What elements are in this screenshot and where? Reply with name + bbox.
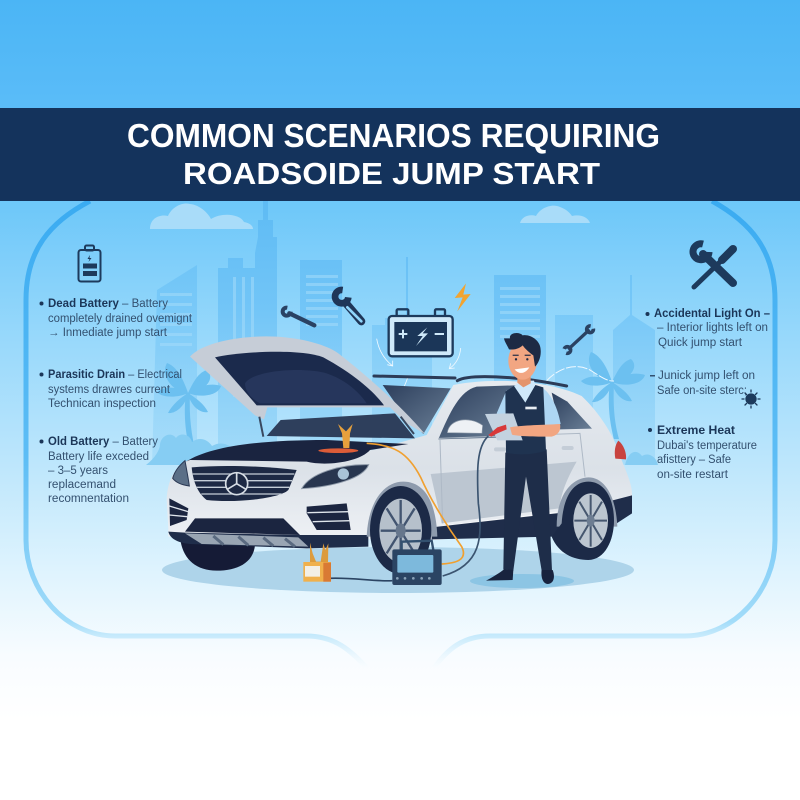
open hood — [190, 336, 425, 434]
ground shadow — [162, 547, 634, 593]
door lower shading — [431, 462, 577, 523]
vest — [505, 385, 546, 454]
left scenario list — [40, 298, 193, 505]
cloud left — [150, 204, 253, 229]
shirt sleeves — [497, 387, 561, 427]
right air intake — [307, 503, 351, 530]
brand star emblem — [226, 473, 248, 495]
dark jumper cable — [443, 436, 488, 576]
technician shadow — [470, 574, 574, 588]
car body — [167, 381, 632, 540]
scenario: old battery: – 3–5 years — [48, 465, 108, 477]
icon: small wrench — [283, 308, 314, 325]
black lead cable — [329, 578, 392, 581]
scenario: dead battery: completely drained ovemignt — [48, 313, 193, 325]
scenario: dead battery: → Inmediate jump start — [48, 327, 168, 339]
car roof rails — [374, 376, 567, 386]
trousers — [503, 449, 552, 571]
face — [508, 342, 537, 380]
front wheel arch — [367, 482, 437, 537]
door details — [438, 433, 585, 527]
lower air intake — [185, 518, 300, 535]
rear wheel rim — [573, 493, 608, 548]
eyebrows and eyes — [513, 355, 531, 360]
battery terminal glow — [318, 448, 358, 453]
door handles — [494, 446, 574, 451]
scenario: jump left on: Safe on-site sterc; — [657, 385, 747, 397]
front lower bumper — [168, 532, 368, 548]
icon: sun — [742, 390, 760, 408]
scenario: parasitic drain: Parasitic Drain – Electrical — [48, 369, 182, 381]
scenario: parasitic drain: Technican inspection — [48, 398, 156, 410]
technician — [485, 333, 561, 584]
skid plate — [185, 533, 308, 547]
skyline background — [152, 201, 655, 465]
panel outline — [26, 201, 775, 668]
door mirror — [447, 420, 483, 433]
scenario: extreme heat: on-site restart — [657, 469, 729, 481]
palm tree right — [581, 352, 645, 439]
red cable clip — [488, 425, 507, 437]
dotted white arc — [547, 367, 614, 381]
icon: orange lightning bolt — [455, 283, 471, 311]
scenario: old battery — [40, 436, 158, 505]
tablet — [485, 413, 523, 440]
left headlight — [173, 461, 189, 486]
jump starter unit — [392, 541, 442, 585]
left air intake — [169, 498, 188, 526]
scenario: accidental light on — [646, 308, 771, 349]
scenario: old battery: Battery life exceded — [48, 451, 149, 463]
scenario: accidental light on: – Interior lights left on — [657, 322, 768, 334]
shoes — [486, 569, 554, 584]
rear tyre — [552, 482, 614, 560]
front wheel rim — [379, 499, 422, 563]
hair — [504, 333, 541, 367]
orange jumper cable — [367, 443, 463, 564]
illustration: car, technician and tools — [167, 283, 632, 585]
scenario: dead battery: Dead Battery – Battery — [48, 298, 168, 310]
icon: thin wrench — [564, 326, 593, 353]
right scenario list — [646, 308, 771, 481]
front tyre — [370, 486, 431, 574]
scenario: old battery: Old Battery – Battery — [48, 436, 158, 448]
cloud right — [520, 206, 590, 223]
windshield — [383, 385, 451, 434]
radiator grille — [192, 466, 297, 501]
scenario: old battery: recomnentation — [48, 493, 129, 505]
building window stripes — [160, 275, 540, 397]
scenario: accidental light on: Quick jump start — [658, 337, 743, 349]
dark hood base — [186, 440, 408, 464]
shirt collar — [514, 381, 535, 403]
rear window — [552, 393, 592, 429]
bush right — [625, 452, 658, 465]
hood struts — [259, 417, 414, 437]
clamp box — [303, 543, 331, 582]
scenario: accidental light on: Accidental Light On – — [654, 308, 771, 320]
icon: large wrench — [335, 290, 361, 321]
front-left tyre — [181, 542, 255, 571]
door window — [438, 385, 515, 439]
forearm and hand — [510, 424, 560, 437]
engine bay glass — [267, 413, 415, 438]
neck — [517, 373, 531, 387]
bushes left — [146, 435, 240, 465]
scenario: dead battery — [40, 298, 193, 339]
title line 2: ROADSOIDE JUMP START — [183, 156, 600, 191]
scenario: jump left on — [650, 370, 755, 397]
scenario: old battery: replacemand — [48, 479, 116, 491]
scenario: extreme heat: afisttery – Safe — [657, 454, 731, 466]
scenario: extreme heat: Extreme Heat — [657, 425, 735, 437]
white arrows — [377, 339, 461, 398]
rear wheel arch — [557, 477, 617, 527]
scenario: parasitic drain — [40, 369, 182, 410]
tail light — [615, 441, 626, 459]
car lower sill — [432, 512, 565, 539]
title line 1: COMMON SCENARIOS REQUIRING — [127, 117, 660, 154]
rear bumper — [612, 495, 632, 527]
icon: battery — [78, 246, 100, 282]
title banner — [0, 108, 800, 201]
scenario: extreme heat: Dubai's temperature — [657, 440, 757, 452]
icon: wrench and screwdriver — [693, 244, 733, 287]
right headlight — [302, 465, 369, 489]
scenario: parasitic drain: systems drawres current — [48, 384, 171, 396]
palm tree left — [157, 363, 221, 456]
scenario: jump left on: Junick jump left on — [658, 370, 755, 382]
icon: car battery — [389, 309, 453, 356]
name badge — [525, 407, 537, 409]
battery clamp — [338, 424, 353, 448]
smile — [515, 367, 529, 373]
scenario: extreme heat — [648, 425, 757, 481]
